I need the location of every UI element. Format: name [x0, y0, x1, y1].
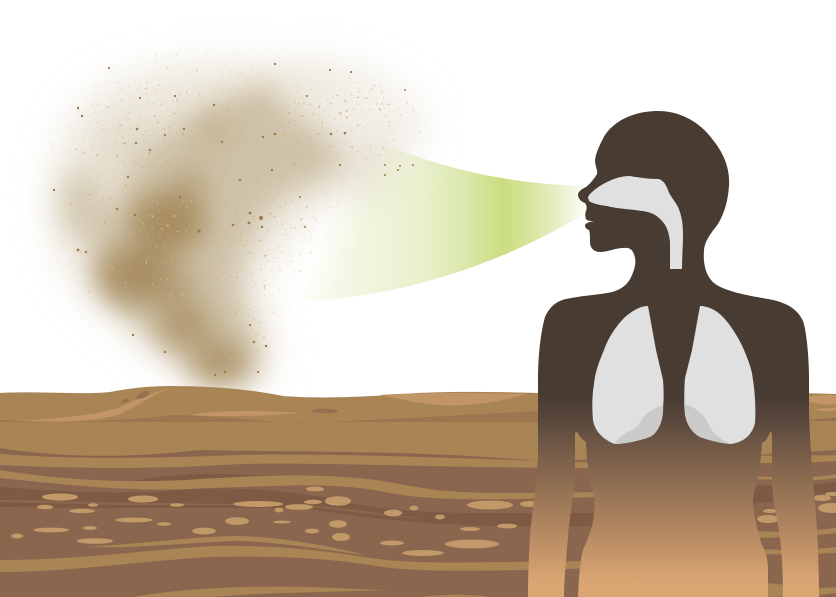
dust cloud [30, 40, 430, 390]
lower thin tan streak [87, 536, 365, 555]
bottom tan band [133, 587, 388, 597]
dark soil band [0, 487, 600, 523]
tan band two [0, 470, 600, 499]
tan band three [0, 546, 600, 572]
cloud haze [54, 62, 425, 385]
soil top layer [0, 386, 836, 597]
green inhalation cone [300, 136, 586, 302]
cloud mid tones [60, 93, 337, 382]
upper brown band [0, 448, 836, 597]
nasal airway and throat [588, 176, 683, 269]
larger dust particles [53, 63, 414, 376]
dark surface streaks [0, 389, 836, 422]
soil ground [0, 386, 836, 597]
body [528, 111, 819, 597]
dust speckle field [30, 40, 430, 390]
light surface streaks [20, 387, 836, 422]
soil pebbles [11, 487, 836, 556]
cloud dark core [99, 84, 278, 382]
left lung [592, 306, 664, 444]
human silhouette [528, 111, 819, 597]
tan band one [0, 454, 600, 468]
right lung [684, 306, 755, 444]
